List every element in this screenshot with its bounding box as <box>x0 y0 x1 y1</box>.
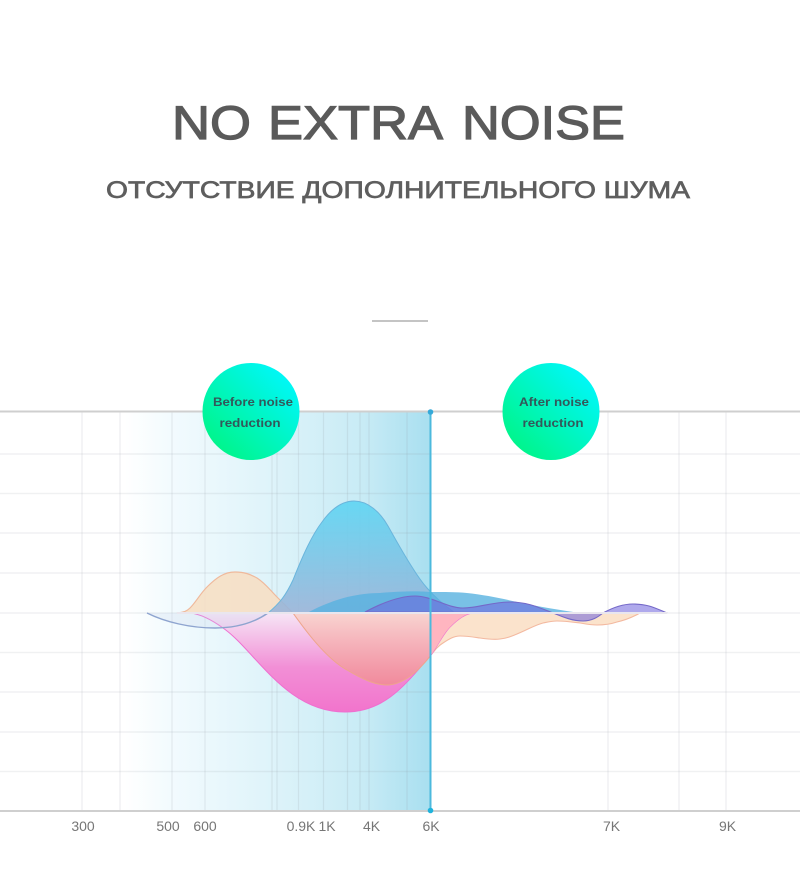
frequency axis labels: 0.9K <box>287 818 316 834</box>
curve: purple wave <box>365 596 667 621</box>
title <box>172 96 625 149</box>
curve: flat blue hump <box>307 591 580 613</box>
curve: salmon overlap <box>293 613 431 685</box>
badge: after noise reduction: reduction <box>522 416 584 430</box>
title: EXTRA <box>268 96 444 149</box>
badge: after noise reduction: After noise <box>519 395 589 409</box>
frequency axis labels: 7K <box>603 818 621 834</box>
6K marker line <box>428 409 433 813</box>
badge: before noise reduction: reduction <box>220 416 280 430</box>
curve: pink lobe below baseline <box>190 613 473 712</box>
badge: after noise reduction <box>502 363 600 460</box>
frequency axis labels: 300 <box>71 818 95 834</box>
frequency axis labels: 500 <box>156 818 180 834</box>
baseline <box>177 612 667 614</box>
frequency axis labels: 4K <box>363 818 381 834</box>
curve: pink right of the marker <box>431 613 473 655</box>
frequency axis labels: 9K <box>719 818 737 834</box>
waveform curves <box>147 501 667 712</box>
subtitle: ОТСУТСТВИЕ ДОПОЛНИТЕЛЬНОГО ШУМА <box>106 177 690 204</box>
title: NOISE <box>462 96 625 149</box>
curve: peach below baseline, right part <box>432 614 640 656</box>
curve: peach lobe above baseline <box>177 572 293 613</box>
frequency axis labels: 1K <box>318 818 336 834</box>
frequency axis labels <box>71 818 737 834</box>
shaded before-noise-reduction band <box>125 412 431 811</box>
frequency axis labels: 6K <box>422 818 440 834</box>
frequency axis labels: 600 <box>193 818 217 834</box>
title: NO <box>172 96 251 149</box>
short divider <box>372 320 428 322</box>
curve: thin blue dip <box>147 613 268 628</box>
badge: before noise reduction: Before noise <box>213 395 293 409</box>
chart grid <box>0 412 800 811</box>
curve: large blue peak <box>268 501 455 613</box>
badge: before noise reduction <box>202 363 300 460</box>
